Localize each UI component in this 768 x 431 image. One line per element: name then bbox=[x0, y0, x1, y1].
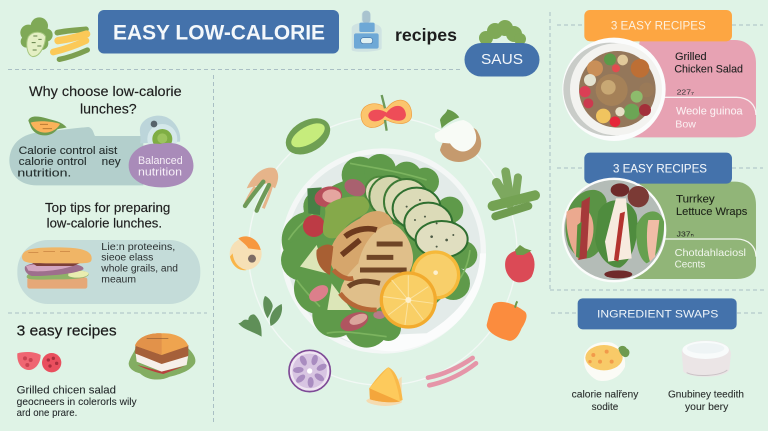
salad: lettuce base bbox=[281, 154, 477, 348]
panel: recipe card 2 bbox=[562, 153, 756, 282]
icon: sliced fruit bbox=[361, 95, 412, 131]
heading: top tips: Top tips for preparing bbox=[45, 200, 170, 215]
card: pink background bbox=[620, 40, 756, 137]
swap label 2: Gnubiney teedith bbox=[668, 390, 744, 401]
icon: burger bbox=[129, 333, 195, 380]
icon: tomato slices bbox=[17, 352, 61, 372]
icon: rice bowl bbox=[584, 342, 629, 381]
recipe text: Grilled bbox=[675, 51, 707, 63]
heading pill: 3 easy recipes: 3 EASY RECIPES bbox=[611, 20, 706, 33]
callout: calorie control: calorie ontrol bbox=[19, 156, 87, 168]
title banner: EASY LOW-CALORIE bbox=[113, 20, 325, 44]
recipe text: Chicken Salad bbox=[674, 63, 743, 75]
icon: leafy sauce badge bbox=[464, 20, 540, 76]
icon: red onion slice bbox=[289, 350, 330, 392]
recipe text: Turrkey bbox=[676, 194, 715, 206]
title banner bbox=[98, 10, 339, 54]
panel: top tips bbox=[17, 200, 200, 304]
heading pill: 3 easy recipes: 3 EASY RECIPES bbox=[613, 162, 707, 175]
heading: why choose: Why choose low-calorie bbox=[29, 83, 182, 99]
recipe text: Chotdahlaciosl bbox=[675, 248, 746, 259]
tips callout: sieoe elass bbox=[101, 252, 153, 263]
recipe description: Grilled chicen salad bbox=[17, 384, 116, 396]
salad: lemon slices bbox=[380, 250, 460, 329]
icon: celery hand bbox=[245, 168, 278, 211]
tips callout: Lie:n proteeins, bbox=[101, 242, 175, 253]
icon: sandwich bbox=[22, 247, 92, 289]
icon: balanced nutrition bubble: Balanced bbox=[138, 155, 183, 167]
recipe text: 227₇ bbox=[677, 88, 694, 97]
icon: leafy sauce badge: SAUS bbox=[481, 51, 523, 68]
center: salad bowl with ingredient ring bbox=[230, 95, 535, 406]
card: green background bbox=[620, 182, 756, 279]
swap label 1: sodite bbox=[592, 402, 619, 413]
callout: calorie control: Calorie control aist bbox=[19, 145, 117, 157]
callout: calorie control bbox=[9, 127, 143, 185]
panel: recipe card 1 bbox=[562, 10, 756, 141]
icon: cucumber bbox=[279, 111, 337, 162]
tips callout: whole grails, and bbox=[100, 264, 178, 275]
panel: ingredient swaps bbox=[572, 298, 744, 413]
recipe text bbox=[674, 51, 743, 131]
swap label 2 bbox=[668, 390, 744, 413]
recipe text bbox=[675, 194, 747, 271]
heading pill: ingredient swaps: INGREDIENT SWAPS bbox=[597, 309, 719, 321]
panel: top tips: low-calorie lunches. bbox=[47, 216, 162, 231]
salad: radishes bbox=[303, 176, 385, 335]
recipes label: recipes bbox=[395, 25, 457, 45]
icon: yogurt tub bbox=[682, 341, 731, 377]
icon: cheese wedge bbox=[366, 367, 403, 406]
icon: salad bowl bbox=[281, 148, 486, 354]
swap label 1 bbox=[572, 390, 639, 413]
callout: calorie control: ney bbox=[102, 156, 121, 168]
panel: 3 easy recipes left bbox=[17, 322, 195, 419]
icon: bacon strips bbox=[428, 358, 476, 385]
heading pill: 3 easy recipes bbox=[584, 10, 732, 41]
recipe description: geocneers in colerorls wily bbox=[17, 397, 137, 408]
swap label 1: calorie nalřeny bbox=[572, 390, 639, 401]
recipe description bbox=[17, 384, 137, 419]
salad: cucumber slices bbox=[365, 176, 468, 258]
swap label 2: your bery bbox=[685, 402, 729, 413]
heading pill: ingredient swaps bbox=[578, 298, 737, 329]
salad: guacamole bbox=[323, 196, 369, 238]
photo: salad bowl bbox=[562, 38, 666, 141]
panel: why choose low-calorie lunches bbox=[9, 83, 193, 187]
icon: potato with cream bbox=[435, 109, 481, 162]
ingredient ring icons bbox=[230, 95, 535, 406]
recipe text: J37ₙ bbox=[677, 229, 694, 238]
recipe text: Weole guinoa bbox=[676, 106, 743, 118]
icon: peach bbox=[230, 236, 262, 270]
icon: orange pepper bbox=[487, 301, 527, 341]
tips callout bbox=[17, 240, 200, 304]
header bbox=[20, 10, 540, 76]
salad: grilled chicken bbox=[316, 211, 413, 310]
callout: calorie control: nutrition. bbox=[17, 167, 71, 179]
photo: lettuce wraps bbox=[562, 178, 666, 282]
heading: 3 easy recipes: 3 easy recipes bbox=[17, 322, 117, 339]
recipe description: ard one prare. bbox=[17, 408, 77, 419]
icon: balanced nutrition bubble bbox=[129, 116, 193, 187]
icon: jar bbox=[352, 11, 382, 52]
recipe text: Bow bbox=[675, 120, 697, 131]
heading pill: 3 easy recipes bbox=[584, 153, 732, 184]
recipe text: Cecnts bbox=[675, 260, 705, 271]
icon: melon slice bbox=[28, 116, 67, 135]
icon: strawberry bbox=[505, 245, 535, 282]
tips callout: meaum bbox=[101, 275, 136, 286]
recipe text: Lettuce Wraps bbox=[676, 206, 747, 218]
icon: lettuce and cucumber bbox=[20, 17, 87, 59]
panel: why choose low-calorie lunches: lunches? bbox=[80, 101, 137, 117]
icon: balanced nutrition bubble: nutrition bbox=[138, 166, 182, 178]
icon: celery bbox=[493, 172, 535, 216]
icon: parsley bbox=[238, 296, 282, 337]
